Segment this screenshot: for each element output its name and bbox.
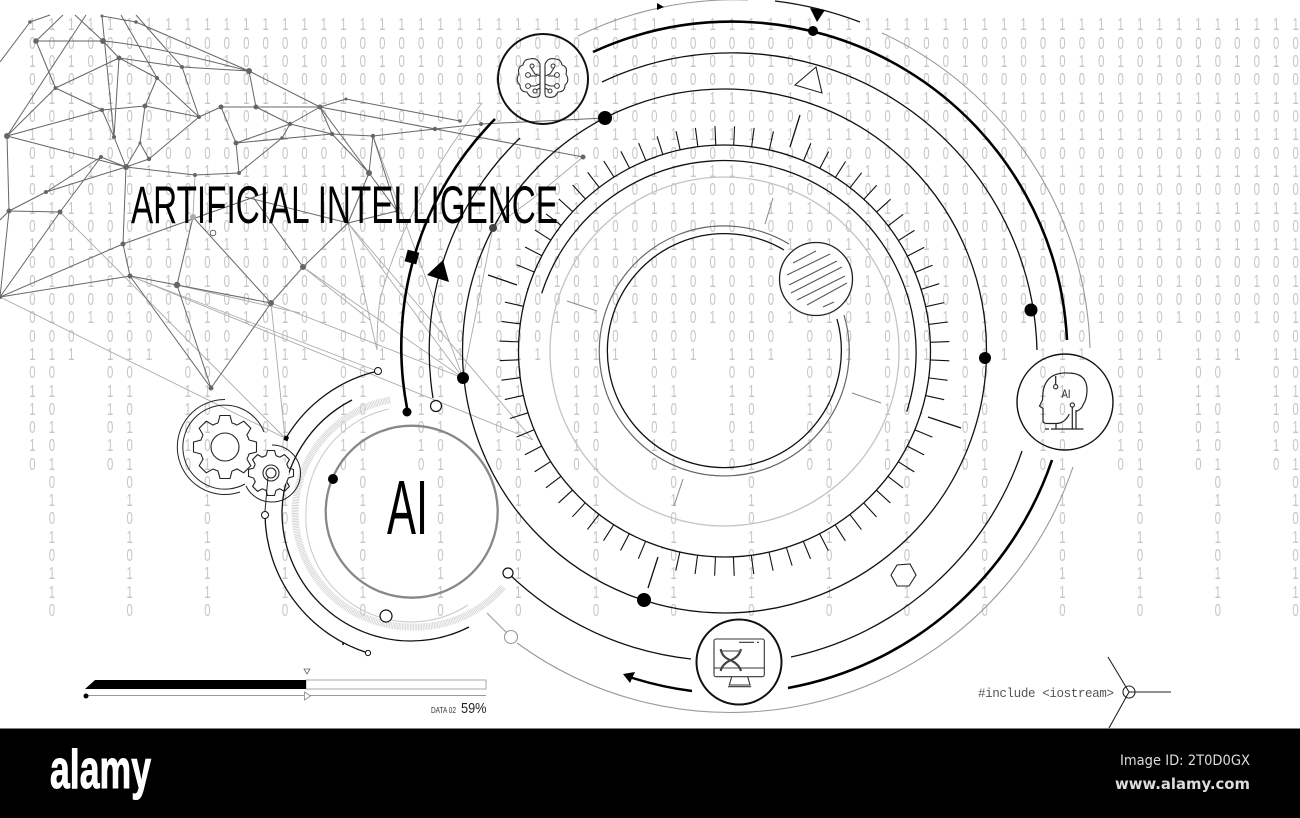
orbit thin top right [775, 1, 860, 22]
inner gray arc [599, 226, 849, 476]
binary code rain background: 11 11 11 11 11 11 11 11 11 11 11 11 11 11 11 11 11 [29, 383, 1300, 402]
binary code rain background: 00 00 00 00 00 00 00 00 00 00 00 00 00 00 00 00 00 [29, 364, 1300, 383]
lower right thick arc [788, 460, 1052, 688]
triangle marker top gray [657, 3, 664, 10]
footer band [0, 728, 1300, 818]
triangle marker outline top [795, 67, 822, 93]
orbit gray top left [578, 0, 748, 36]
arrow: lower left [623, 672, 692, 691]
binary code rain background [29, 16, 1300, 621]
binary code rain background: 000000000000000000000000000000000000000000000000000000000000000000 [29, 71, 1300, 90]
binary code rain background: 111111111111111111111111111111111111111111111111111111111111111111 [29, 163, 1300, 182]
mesh curved light line [377, 103, 482, 350]
binary code rain background: 1 1 1 1 1 1 1 1 1 1 1 1 1 1 1 1 1 [29, 565, 1300, 584]
orbit gray right [882, 33, 1090, 348]
big gear rings [177, 399, 264, 494]
binary code rain background: 0 0 0 0 0 0 0 0 0 0 0 0 0 0 0 0 0 [29, 602, 1300, 621]
icon: AI head: AI [1062, 387, 1070, 401]
hatched sphere [780, 242, 852, 316]
binary code rain background: 000000000000000000000000000000000000000000000000000000000000000000 [29, 108, 1300, 127]
binary code rain background: 111 111 111 111 111 111 111 111 111 111 111 111 111 111 111 111 11 [29, 346, 1300, 365]
polygon network mesh [0, 14, 605, 440]
lower left arc [508, 573, 691, 659]
dial outer circle [518, 145, 930, 557]
open node left [430, 400, 442, 412]
code label: #include <iostream> [978, 687, 1114, 701]
binary code rain background: 10 10 10 10 10 10 10 10 10 10 10 10 10 10 10 10 10 [29, 401, 1300, 420]
binary code rain background: 000000000000000000000000000000000000000000000000000000000000000000 [29, 291, 1300, 310]
gray connector and open node [487, 613, 518, 644]
node dots on orbits [402, 26, 1038, 607]
dial second arc [542, 161, 916, 412]
progress baseline [86, 694, 486, 696]
icon: gears [177, 399, 300, 511]
square marker [405, 250, 419, 264]
binary code rain background: 1 1 1 1 1 1 1 1 1 1 1 1 1 1 1 1 1 [29, 584, 1300, 603]
lower right arc [791, 451, 1022, 657]
progress bar [84, 669, 487, 717]
short gray inner ticks [567, 198, 881, 506]
outer gray arc lower [517, 467, 1073, 712]
brand logo: alamy [50, 738, 151, 800]
binary code rain background: 000000000000000000000000000000000000000000000000000000000000000000 [29, 145, 1300, 164]
binary code rain background: 000000000000000000000000000000000000000000000000000000000000000000 [29, 35, 1300, 54]
progress track [306, 680, 486, 689]
big gear [194, 416, 256, 478]
hatched gray ring [295, 400, 503, 627]
icon: DNA monitor [696, 620, 782, 704]
triangle marker left [427, 260, 449, 282]
hexagon marker [891, 564, 916, 586]
binary code rain background: 10 10 10 10 10 10 10 10 10 10 10 10 10 10 10 10 10 [29, 437, 1300, 456]
binary code rain background: 0 0 0 0 0 0 0 0 0 0 0 0 0 0 0 0 0 [29, 547, 1300, 566]
binary code rain background: 0 0 0 0 0 0 0 0 0 0 0 0 0 0 0 0 0 [29, 474, 1300, 493]
binary code rain background: 1 1 1 1 1 1 1 1 1 1 1 1 1 1 1 1 1 [29, 529, 1300, 548]
title: ARTIFICIAL INTELLIGENCE [131, 176, 558, 235]
open node lower left [503, 568, 513, 578]
binary code rain background: 111111111111111111111111111111111111111111111111111111111111111111 [29, 16, 1300, 35]
orbit arc top [602, 53, 1037, 350]
orbit ring r262 [462, 89, 986, 613]
footer background [0, 728, 1300, 818]
progress marker down [304, 669, 310, 674]
connector hub icon [1108, 657, 1171, 728]
dial tick ring [500, 127, 949, 575]
binary code rain background: 111111111111111111111111111111111111111111111111111111111111111111 [29, 126, 1300, 145]
central concentric dial [488, 115, 961, 588]
outer orbit arcs [401, 0, 1090, 712]
progress fill [85, 680, 306, 689]
binary code rain background: 000000000000000000000000000000000000000000000000000000000000000000 [29, 254, 1300, 273]
progress value: 59% [461, 701, 487, 717]
website: www.alamy.com [1115, 775, 1250, 793]
AI circle [326, 426, 498, 598]
AI circle dot [328, 474, 338, 484]
icon: brain [498, 34, 588, 124]
binary code rain background: 0 0 0 0 0 0 0 0 0 0 0 0 0 0 0 0 0 [29, 510, 1300, 529]
inner black arc [607, 234, 841, 468]
thin gray ring [306, 409, 468, 622]
binary code rain background: 010101010101010101010101010101010101010101010101010101010101010101 [29, 309, 1300, 328]
binary code rain background: 000000000000000000000000000000000000000000000000000000000000000000 [29, 218, 1300, 237]
progress marker right [304, 692, 310, 700]
mesh dark lines [0, 15, 605, 388]
binary code rain background: 111111111111111111111111111111111111111111111111111111111111111111 [29, 236, 1300, 255]
AI label: AI [387, 465, 428, 551]
binary code rain background: 1 1 1 1 1 1 1 1 1 1 1 1 1 1 1 1 1 [29, 492, 1300, 511]
triangle marker top black [810, 8, 825, 22]
left second arc [429, 138, 520, 398]
binary code rain background: 000000000000000000000000000000000000000000000000000000000000000000 [29, 181, 1300, 200]
icon: AI head [1017, 354, 1113, 450]
image id: Image ID: 2T0D0GX [1120, 753, 1250, 769]
progress label: DATA 02 [431, 706, 456, 715]
left thick arc [401, 119, 495, 408]
long ticks [509, 136, 940, 566]
orbit thick arc top [593, 22, 1067, 340]
binary code rain background: 111111111111111111111111111111111111111111111111111111111111111111 [29, 200, 1300, 219]
mesh light lines [0, 136, 583, 440]
dial gray ring [550, 177, 899, 526]
binary code rain background: 01 01 01 01 01 01 01 01 01 01 01 01 01 01 01 01 01 [29, 419, 1300, 438]
mesh open node [210, 230, 216, 236]
progress start dot [84, 694, 88, 698]
binary code rain background: 111111111111111111111111111111111111111111111111111111111111111111 [29, 90, 1300, 109]
connector nodes [262, 368, 392, 656]
binary code rain background: 01 01 01 01 01 01 01 01 01 01 01 01 01 01 01 01 01 [29, 456, 1300, 475]
mesh nodes [0, 14, 586, 390]
binary code rain background: 101010101010101010101010101010101010101010101010101010101010101010 [29, 53, 1300, 72]
binary code rain background: 000 000 000 000 000 000 000 000 000 000 000 000 000 000 000 000 00 [29, 328, 1300, 347]
black ring arc [282, 400, 469, 641]
arc to open node top [286, 371, 378, 438]
AI badge cluster [262, 368, 503, 656]
binary code rain background: 010101010101010101010101010101010101010101010101010101010101010101 [29, 273, 1300, 292]
small gear [248, 450, 294, 496]
small gear rings and connector [246, 445, 300, 511]
arc to open node bottom [265, 515, 368, 653]
